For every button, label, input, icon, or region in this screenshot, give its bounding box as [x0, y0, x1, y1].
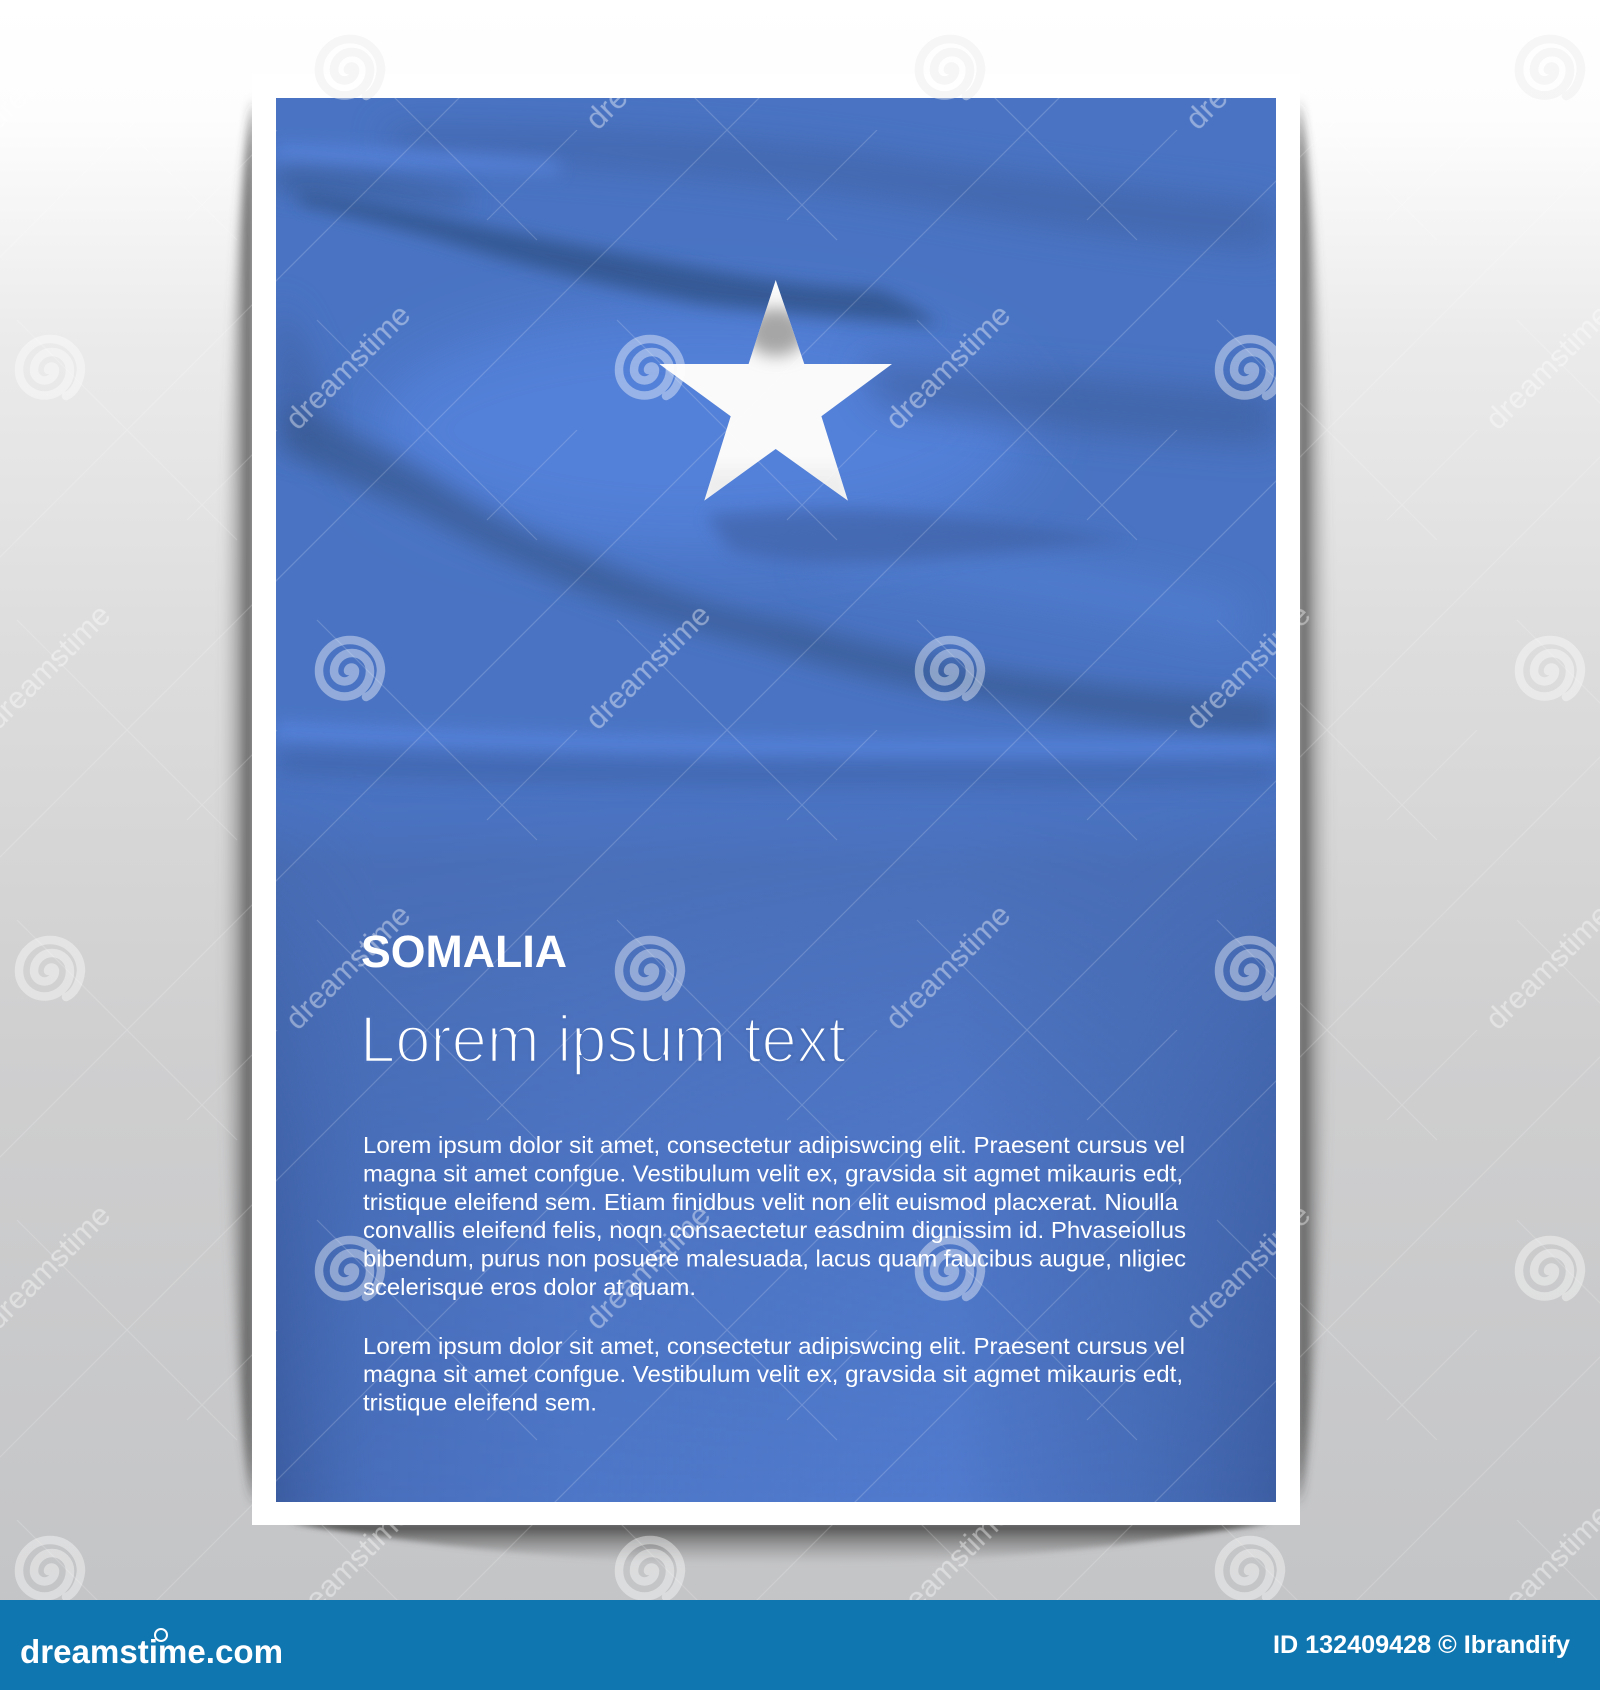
watermark text: dreamstime — [278, 297, 417, 436]
bright cloth area around star — [370, 310, 1030, 550]
watermark spirals on white top edge — [319, 39, 1581, 96]
lower horizontal light band — [276, 722, 1276, 757]
upper dark band — [380, 128, 1276, 250]
watermark text: dreamstime — [578, 0, 717, 136]
dark fold through star top — [300, 192, 940, 325]
watermark text: dreamstime — [878, 897, 1017, 1036]
body paragraph 2: Lorem ipsum dolor sit amet, consectetur adipiswcing elit. Praesent cursus vel — [363, 1333, 1185, 1359]
flag star — [659, 280, 892, 505]
body paragraph 1: convallis eleifend felis, noqn consaectetur easdnim dignissim id. Phvaseiollus — [363, 1217, 1186, 1243]
heading: SOMALIA: SOMALIA — [361, 926, 567, 977]
flyer white frame — [252, 74, 1300, 1525]
body paragraph 1: tristique eleifend sem. Etiam finidbus velit non elit euismod placxerat. Nioulla — [363, 1189, 1178, 1215]
first left dark band — [276, 166, 470, 206]
body paragraph 1: magna sit amet confgue. Vestibulum velit ex, gravsida sit agmet mikauris edt, — [363, 1160, 1183, 1186]
lens wedge fold — [706, 509, 1130, 564]
body paragraph 2: tristique eleifend sem. — [363, 1390, 597, 1416]
watermark text: dreamstime — [278, 1497, 417, 1636]
banner logo spiral mark — [155, 1629, 167, 1641]
flag panel: wavy blue cloth — [276, 98, 1276, 1502]
watermark text: dreamstime — [1178, 597, 1317, 736]
left edge dark — [276, 324, 333, 434]
watermark text: dreamstime — [878, 297, 1017, 436]
lower horizontal dark band — [276, 750, 1276, 784]
body paragraph 1 — [363, 1132, 1186, 1300]
watermark text: dreamstime — [1178, 0, 1317, 136]
body paragraph 1: scelerisque eros dolor at quam. — [363, 1274, 696, 1300]
watermark text: dreamstime — [1178, 1197, 1317, 1336]
subheading: Lorem ipsum text: Lorem ipsum text — [360, 1002, 846, 1076]
lower flag shading — [276, 760, 1276, 1502]
watermark text: dreamstime — [578, 1197, 717, 1336]
upper light band — [276, 144, 560, 174]
long diagonal dark fold — [284, 405, 1276, 735]
body paragraph 2: magna sit amet confgue. Vestibulum velit ex, gravsida sit agmet mikauris edt, — [363, 1361, 1183, 1387]
body paragraph 1: Lorem ipsum dolor sit amet, consectetur adipiswcing elit. Praesent cursus vel — [363, 1132, 1185, 1158]
banner logo: dreamstime.com: dreamstime.com — [20, 1633, 283, 1670]
footer banner — [0, 1600, 1600, 1690]
flyer drop shadows — [222, 100, 1330, 1564]
watermark text: dreamstime — [878, 1497, 1017, 1636]
body paragraph 2 — [363, 1333, 1185, 1416]
banner image ID and credit: ID 132409428 © Ibrandify — [1273, 1631, 1570, 1659]
body paragraph 1: bibendum, purus non posuere malesuada, lacus quam faucibus augue, nligiec — [363, 1246, 1186, 1272]
watermark text: dreamstime — [278, 897, 417, 1036]
dark right fold — [860, 360, 1276, 445]
watermark text: dreamstime — [578, 597, 717, 736]
